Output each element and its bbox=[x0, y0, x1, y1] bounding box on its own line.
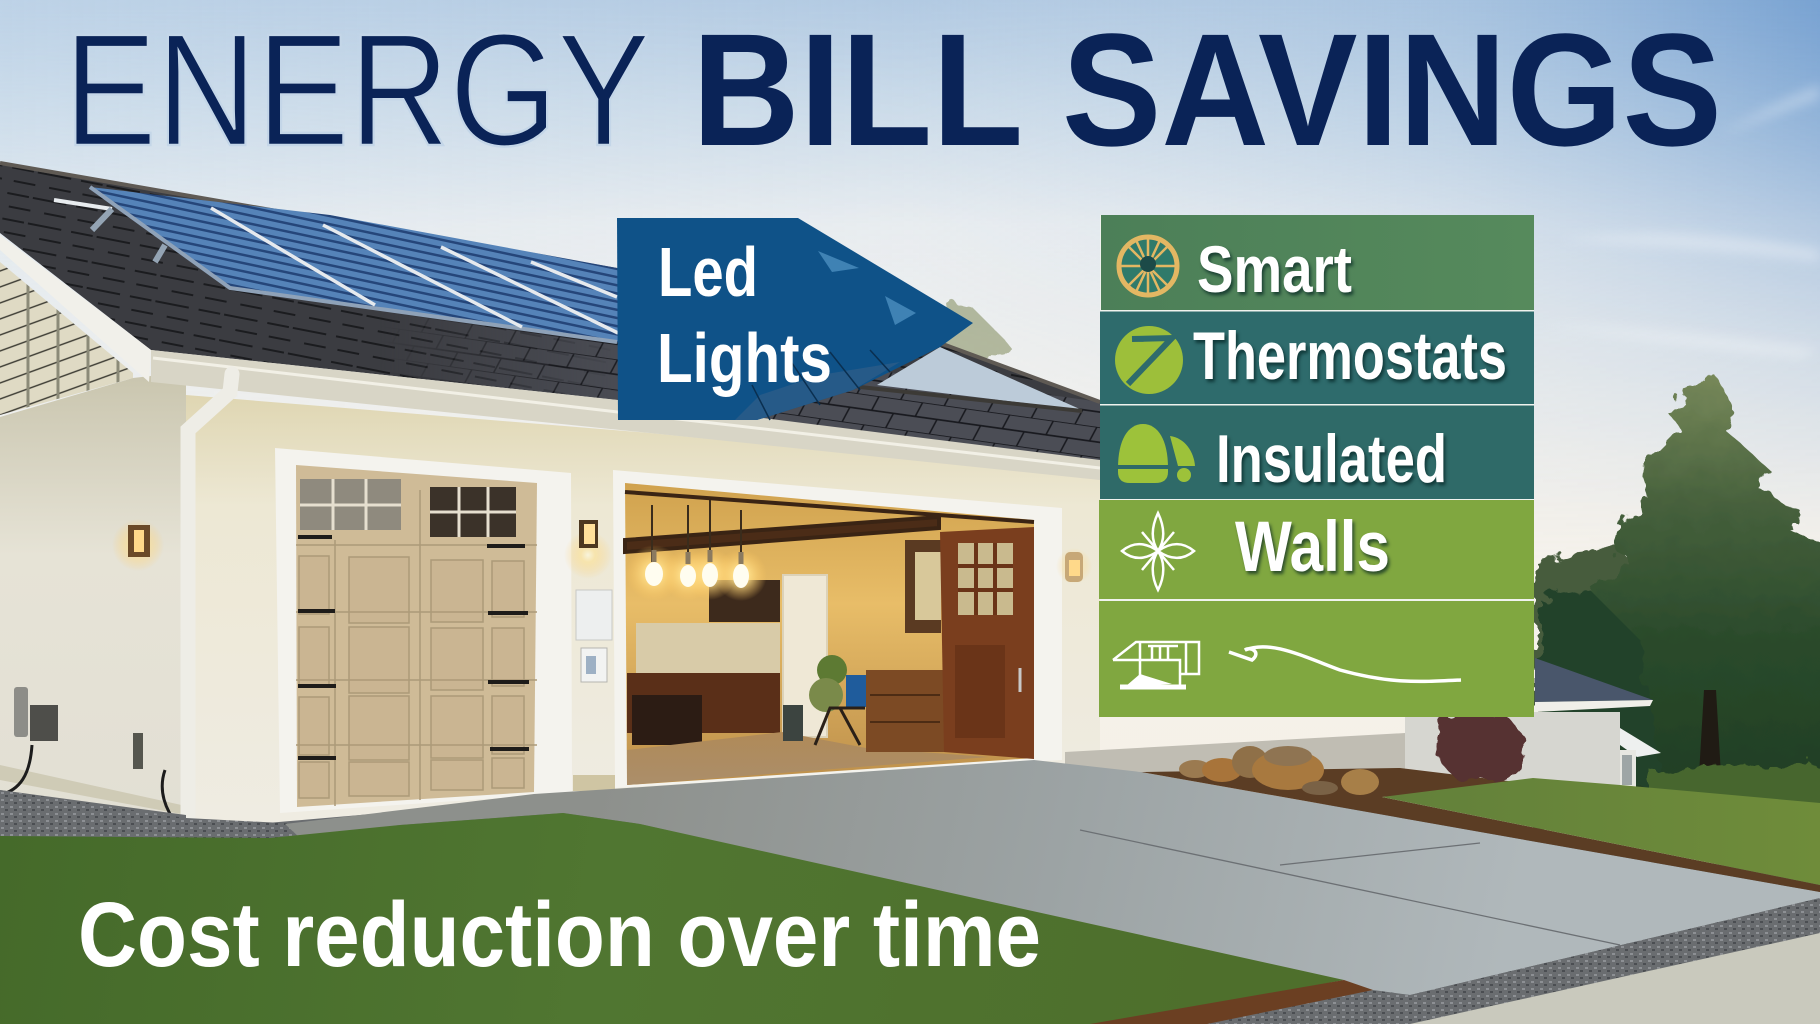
arrow accent triangles bbox=[818, 251, 916, 325]
main wall bbox=[186, 395, 1100, 840]
title light word: ENERGY bbox=[64, 0, 650, 179]
gravel strip and sidewalk bbox=[1207, 898, 1820, 1024]
solar panels bbox=[54, 187, 640, 342]
translucent shingle overlay bbox=[735, 362, 900, 420]
title bold word: BILL SAVINGS bbox=[692, 0, 1722, 179]
rocks bbox=[1179, 746, 1379, 795]
neighbouring small house bbox=[1405, 658, 1661, 788]
ground base bbox=[0, 770, 1820, 1024]
driveway bbox=[285, 760, 1820, 995]
icon: line-art house bbox=[1113, 642, 1199, 688]
row: Smart: Smart bbox=[1197, 232, 1352, 306]
dresser and plants bbox=[783, 655, 944, 752]
door hinges bbox=[298, 537, 529, 758]
background trees and forest bbox=[1534, 372, 1820, 830]
door panels bbox=[296, 490, 537, 806]
row: Insulated: Insulated bbox=[1216, 421, 1447, 497]
row: Walls bbox=[1099, 500, 1534, 599]
kitchen backsplash and cabinets bbox=[627, 580, 780, 745]
icon: green dial bbox=[1115, 326, 1183, 394]
right lawn bbox=[1382, 778, 1820, 885]
icon: insulation shapes bbox=[1118, 424, 1195, 483]
icon: gold wheel bbox=[1119, 237, 1177, 295]
wall base trim bbox=[0, 765, 186, 815]
icon: leaf compass bbox=[1122, 513, 1194, 590]
row: Thermostats bbox=[1100, 312, 1534, 404]
background tree behind roof bbox=[935, 300, 1008, 362]
brick band bbox=[1065, 733, 1405, 775]
left gable siding bbox=[0, 262, 133, 415]
downspout bbox=[188, 374, 232, 825]
label: Led: Led bbox=[658, 233, 758, 311]
wall mirror bbox=[905, 540, 941, 633]
label: Lights: Lights bbox=[657, 319, 832, 397]
pendant lights bbox=[626, 500, 767, 601]
left wall bbox=[0, 372, 186, 830]
wall lamps and control panels bbox=[112, 519, 1092, 791]
open garage bbox=[613, 470, 1062, 788]
shrub bbox=[1437, 711, 1525, 783]
front lawn bbox=[0, 813, 1373, 1024]
row: Walls: Walls bbox=[1235, 508, 1390, 587]
panel: green list bbox=[1099, 215, 1534, 717]
pale roof panel bbox=[877, 347, 1082, 410]
row: Insulated bbox=[1100, 406, 1534, 499]
wooden door bbox=[940, 527, 1034, 759]
decorative squiggle bbox=[1229, 647, 1461, 681]
callout arrow: LED lights bbox=[617, 218, 973, 420]
roof bbox=[0, 163, 1100, 462]
garage floor bbox=[627, 732, 989, 785]
row: blank line bbox=[1099, 601, 1534, 717]
title bbox=[64, 0, 1722, 179]
EV charger and meter bbox=[0, 687, 178, 825]
interior door bbox=[783, 575, 827, 737]
white fascia and gutter bbox=[0, 235, 1100, 480]
caption: Cost reduction over time bbox=[78, 884, 1041, 986]
left garage door bbox=[275, 448, 572, 813]
mulch edge bbox=[1141, 768, 1820, 892]
row: Smart bbox=[1101, 215, 1534, 310]
gravel bed bbox=[0, 790, 320, 838]
background sky bbox=[0, 0, 1820, 750]
row: Thermostats: Thermostats bbox=[1193, 318, 1507, 394]
ceiling beam bbox=[625, 492, 1034, 552]
door windows bbox=[300, 479, 516, 537]
